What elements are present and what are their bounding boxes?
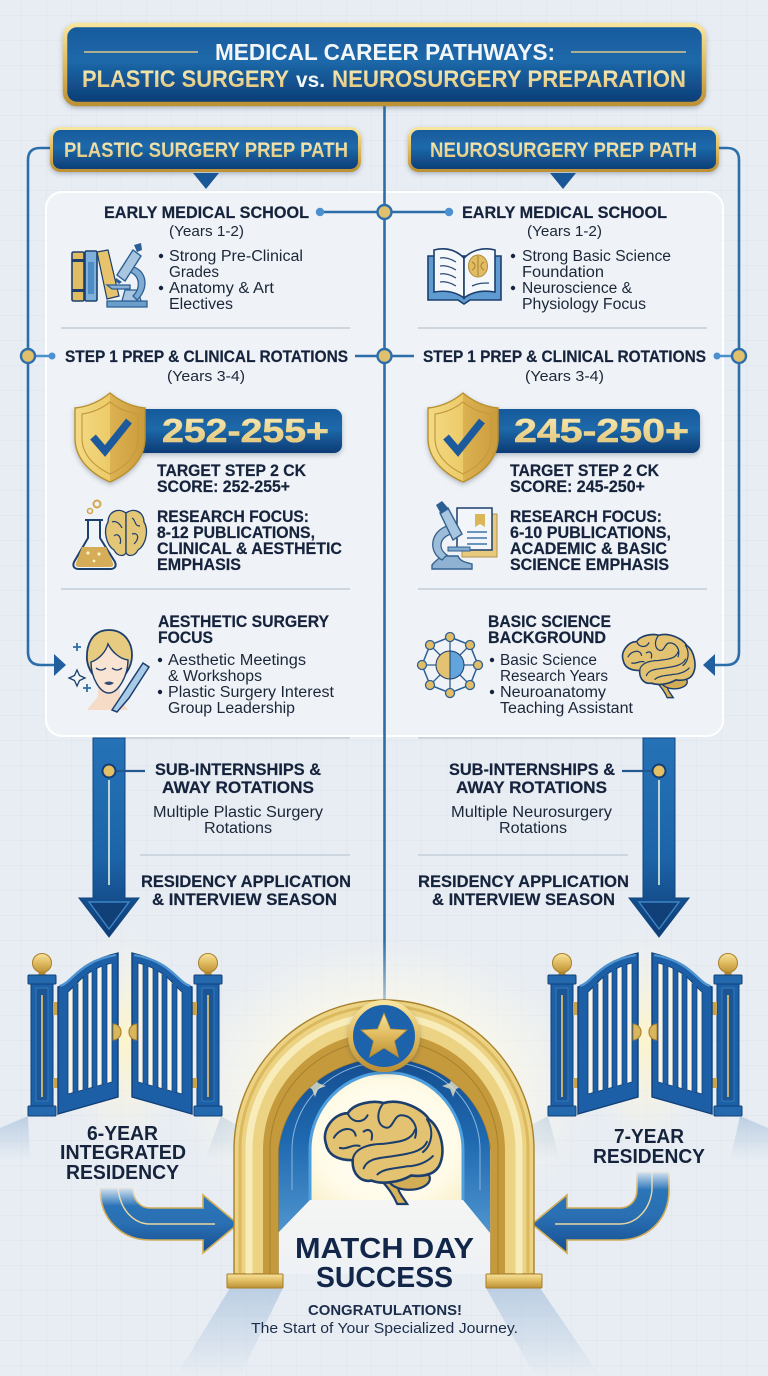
- sparkle left: [304, 1075, 326, 1097]
- research text: EMPHASIS: [157, 556, 241, 574]
- target score text: [510, 462, 659, 496]
- sub-internships plastic: AWAY ROTATIONS: [162, 779, 314, 797]
- label: 7-year residency: RESIDENCY: [593, 1146, 706, 1168]
- sub-internships neuro: Rotations: [499, 820, 567, 837]
- target score text: TARGET STEP 2 CK: [157, 462, 306, 480]
- gold arch: [234, 1000, 534, 1274]
- target score text: TARGET STEP 2 CK: [510, 462, 659, 480]
- bullets: Grades: [169, 264, 219, 281]
- title line 2: vs.: [296, 69, 325, 92]
- score badge: [485, 409, 700, 453]
- icon: brain: [623, 634, 695, 698]
- timeline node row 2: [21, 349, 746, 363]
- heading: STEP 1 PREP & CLINICAL ROTATIONS: [65, 348, 348, 366]
- research text: [510, 508, 671, 574]
- center connector line: [383, 104, 386, 1002]
- sub-internships plastic: [153, 761, 323, 837]
- bullets: Neuroscience &: [522, 280, 633, 297]
- sparkle right: [442, 1075, 464, 1097]
- bullets: Foundation: [522, 264, 604, 281]
- heading: STEP 1 PREP & CLINICAL ROTATIONS: [423, 348, 706, 366]
- bullets: Electives: [169, 296, 233, 313]
- title banner: [65, 25, 704, 104]
- right side connector with arrow: [703, 148, 739, 676]
- header pointer left: [193, 173, 219, 189]
- header pointer right: [550, 173, 576, 189]
- bullets: [490, 652, 634, 717]
- heading: FOCUS: [158, 629, 213, 647]
- label: 6-year integrated residency: RESIDENCY: [66, 1162, 180, 1184]
- residency application neuro: & INTERVIEW SEASON: [432, 891, 615, 909]
- section: early med school, plastic: [72, 204, 309, 313]
- gate glow right: [583, 930, 707, 1150]
- years: (Years 1-2): [527, 223, 602, 240]
- gate: 6-year: [28, 953, 222, 1116]
- section: step 1 neuro: [423, 348, 706, 574]
- section: aesthetic surgery focus: [69, 613, 335, 717]
- residency application plastic: RESIDENCY APPLICATION: [141, 873, 351, 891]
- research text: RESEARCH FOCUS:: [157, 508, 309, 526]
- right plinth: [486, 1274, 542, 1288]
- years: (Years 3-4): [167, 368, 245, 385]
- label: 7-year residency: 7-YEAR: [614, 1126, 685, 1148]
- sub-internships neuro: [449, 761, 615, 837]
- congratulations text: The Start of Your Specialized Journey.: [251, 1320, 518, 1337]
- target score text: SCORE: 245-250+: [510, 478, 645, 496]
- heading: BASIC SCIENCE: [488, 613, 611, 631]
- title line 2: [82, 66, 686, 93]
- years: (Years 1-2): [169, 223, 244, 240]
- score badge: 252-255+: [162, 412, 329, 449]
- residency application neuro: RESIDENCY APPLICATION: [418, 873, 629, 891]
- sub-internships plastic: SUB-INTERNSHIPS &: [155, 761, 321, 779]
- floor light rays: [0, 1116, 768, 1376]
- bullets: Strong Pre-Clinical: [169, 248, 303, 265]
- congratulations text: [251, 1302, 518, 1337]
- bullets: Plastic Surgery Interest: [168, 684, 335, 701]
- heading: EARLY MEDICAL SCHOOL: [462, 204, 667, 222]
- title line 1: MEDICAL CAREER PATHWAYS:: [215, 39, 555, 65]
- label: 6-year integrated residency: 6-YEAR: [87, 1123, 159, 1145]
- label: 6-year integrated residency: [60, 1123, 186, 1184]
- icon: books and microscope: [72, 243, 147, 307]
- section: basic science background: [418, 613, 695, 717]
- icon: face and scalpel: [69, 630, 149, 712]
- bullets: [511, 248, 671, 313]
- bullets: Teaching Assistant: [500, 700, 634, 717]
- research text: [157, 508, 342, 574]
- match day heading: SUCCESS: [316, 1262, 453, 1294]
- section: step 1 plastic: [65, 348, 348, 574]
- sub-internships plastic: Multiple Plastic Surgery: [153, 804, 323, 821]
- heading: EARLY MEDICAL SCHOOL: [104, 204, 309, 222]
- timeline node row 1: [316, 205, 453, 219]
- left side connector with arrow: [28, 148, 66, 676]
- years: (Years 3-4): [525, 368, 604, 385]
- target score text: [157, 462, 306, 496]
- icon: gold shield: [428, 393, 498, 482]
- heading: [488, 613, 611, 647]
- arch opening light: [278, 1072, 490, 1274]
- bullets: [159, 248, 303, 313]
- icon: flask and brain: [73, 500, 146, 569]
- label: 6-year integrated residency: INTEGRATED: [60, 1142, 186, 1164]
- section: early med school, neuro: [428, 204, 671, 313]
- congratulations text: CONGRATULATIONS!: [308, 1302, 462, 1319]
- heading: [158, 613, 329, 647]
- bullets: Basic Science: [500, 652, 597, 669]
- left curved arrow: [96, 1186, 238, 1253]
- bullets: Group Leadership: [168, 700, 295, 717]
- score badge: 245-250+: [514, 412, 689, 449]
- bullets: Anatomy & Art: [169, 280, 275, 297]
- bullets: & Workshops: [168, 668, 262, 685]
- icon: microscope and document: [432, 501, 497, 569]
- score badge: [130, 409, 342, 453]
- icon: gold shield: [75, 393, 145, 482]
- bullets: [158, 652, 335, 717]
- icon: central brain: [325, 1102, 442, 1204]
- arch glow: [174, 940, 594, 1240]
- header: plastic surgery prep path: [52, 128, 360, 170]
- title line 2: PLASTIC SURGERY: [82, 66, 289, 93]
- research text: 6-10 PUBLICATIONS,: [510, 524, 671, 542]
- match day heading: [295, 1233, 474, 1294]
- left down arrow: [79, 738, 145, 937]
- bullets: Neuroanatomy: [500, 684, 606, 701]
- bullets: Aesthetic Meetings: [168, 652, 306, 669]
- right down arrow: [622, 738, 689, 937]
- bullets: Strong Basic Science: [522, 248, 671, 265]
- bullets: Physiology Focus: [522, 296, 646, 313]
- sub-internships neuro: AWAY ROTATIONS: [456, 779, 607, 797]
- match day archway: [227, 1000, 542, 1288]
- label: 7-year residency: [593, 1126, 706, 1168]
- left plinth: [227, 1274, 283, 1288]
- blue inner rim: [310, 1072, 463, 1200]
- icon: open book with brain: [428, 249, 501, 304]
- right curved arrow: [532, 1170, 674, 1253]
- sub-internships neuro: SUB-INTERNSHIPS &: [449, 761, 615, 779]
- icon: neural network: [418, 632, 482, 698]
- header: neurosurgery prep path: [410, 128, 718, 170]
- research text: 8-12 PUBLICATIONS,: [157, 524, 315, 542]
- gate: 7-year: [548, 953, 742, 1116]
- residency application plastic: & INTERVIEW SEASON: [152, 891, 337, 909]
- research text: SCIENCE EMPHASIS: [510, 556, 669, 574]
- research text: RESEARCH FOCUS:: [510, 508, 662, 526]
- match day heading: MATCH DAY: [295, 1233, 474, 1265]
- header: plastic surgery prep path: PLASTIC SURGERY PREP PATH: [64, 139, 348, 162]
- panel: preparation comparison: [46, 192, 723, 736]
- target score text: SCORE: 252-255+: [157, 478, 290, 496]
- bullets: Research Years: [500, 668, 608, 685]
- sub-internships plastic: Rotations: [204, 820, 272, 837]
- title line 2: NEUROSURGERY PREPARATION: [332, 66, 686, 93]
- heading: BACKGROUND: [488, 629, 606, 647]
- star medallion: [350, 1002, 418, 1070]
- heading: AESTHETIC SURGERY: [158, 613, 329, 631]
- residency application neuro: [418, 873, 629, 909]
- research text: ACADEMIC & BASIC: [510, 540, 667, 558]
- arch inner blue: [278, 1048, 490, 1233]
- gate glow left: [63, 930, 187, 1150]
- sub-internships neuro: Multiple Neurosurgery: [451, 804, 612, 821]
- research text: CLINICAL & AESTHETIC: [157, 540, 342, 558]
- residency application plastic: [141, 873, 351, 909]
- header: neurosurgery prep path: NEUROSURGERY PREP PATH: [430, 139, 697, 162]
